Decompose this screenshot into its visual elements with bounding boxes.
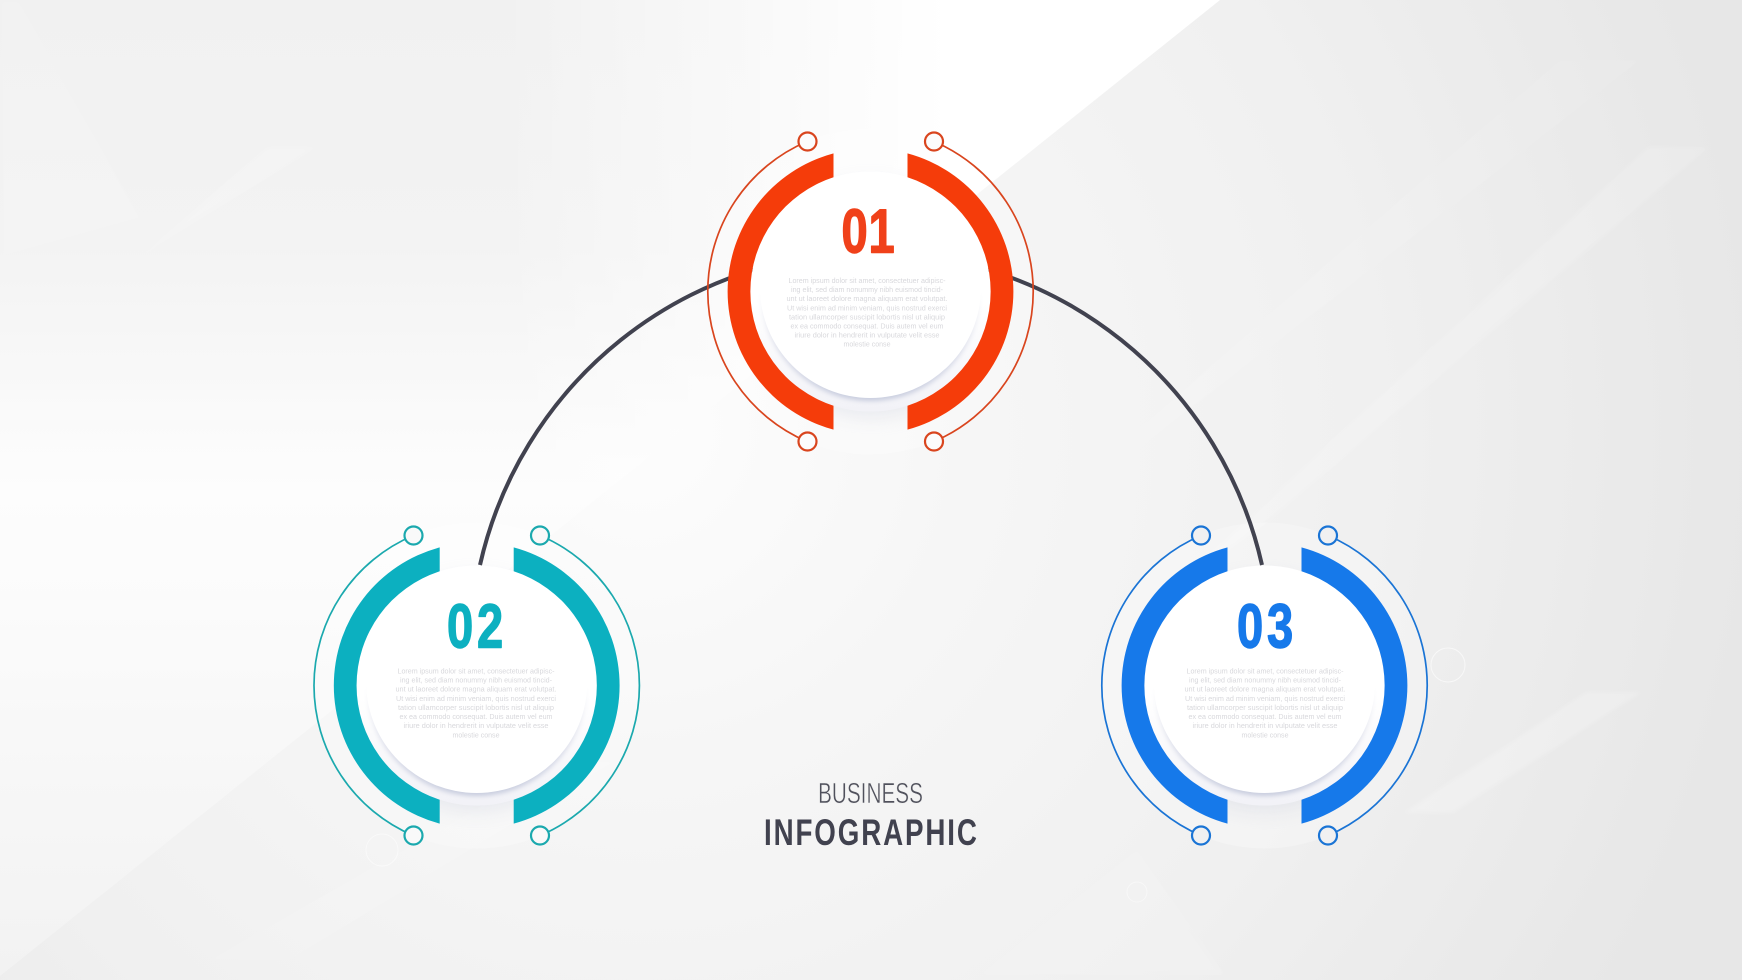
description 03: Lorem ipsum dolor sit amet, consectetuer adipisc- bbox=[1186, 666, 1344, 676]
description 02: tation ullamcorper suscipit lobortis nisl ut aliquip bbox=[398, 703, 554, 712]
description 01: ing elit, sed diam nonummy nibh euismod tincid- bbox=[791, 285, 943, 294]
description 01 bbox=[786, 276, 948, 348]
description 03: ing elit, sed diam nonummy nibh euismod tincid- bbox=[1189, 676, 1341, 684]
soft halos behind rings bbox=[314, 128, 1428, 848]
description 02: Lorem ipsum dolor sit amet, consectetuer adipisc- bbox=[398, 666, 555, 676]
description 03: molestie conse bbox=[1242, 730, 1288, 740]
thick ring segments 02 bbox=[334, 547, 620, 824]
end dots 03 bbox=[1192, 526, 1337, 844]
title line: business: BUSINESS bbox=[818, 778, 923, 810]
title bbox=[764, 778, 979, 853]
connector arc bbox=[480, 252, 1262, 565]
description 03: unt ut laoreet dolore magna aliquam erat volutpat. bbox=[1184, 684, 1346, 694]
description 01: Ut wisi enim ad minim veniam, quis nostrud exerci bbox=[787, 304, 947, 312]
description 02: ex ea commodo consequat. Duis autem vel eum bbox=[400, 712, 552, 721]
number 01: 01 bbox=[842, 196, 895, 266]
thin outline arcs 03 bbox=[1102, 536, 1427, 836]
description 03: tation ullamcorper suscipit lobortis nisl ut aliquip bbox=[1187, 703, 1343, 712]
description 02: unt ut laoreet dolore magna aliquam erat volutpat. bbox=[396, 684, 556, 694]
description 01: unt ut laoreet dolore magna aliquam erat volutpat. bbox=[786, 294, 948, 303]
description 03: Ut wisi enim ad minim veniam, quis nostrud exerci bbox=[1185, 694, 1345, 703]
thin outline arcs 02 bbox=[314, 536, 639, 836]
description 03: iriure dolor in hendrerit in vulputate velit esse bbox=[1192, 721, 1338, 730]
end dots 01 bbox=[798, 132, 943, 450]
description 02: molestie conse bbox=[452, 730, 500, 740]
thick ring segments 01 bbox=[728, 153, 1013, 430]
title line: infographic: INFOGRAPHIC bbox=[764, 811, 979, 853]
thick ring segments 03 bbox=[1122, 547, 1407, 824]
number 03: 03 bbox=[1237, 591, 1297, 661]
thin outline arcs 01 bbox=[708, 142, 1033, 442]
description 01: tation ullamcorper suscipit lobortis nisl ut aliquip bbox=[789, 312, 945, 322]
node 03 bbox=[1102, 526, 1427, 844]
node 02 bbox=[314, 526, 639, 844]
description 02 bbox=[396, 666, 556, 740]
description 02: ing elit, sed diam nonummy nibh euismod tincid- bbox=[400, 676, 552, 684]
number 02: 02 bbox=[447, 591, 507, 661]
node 01 bbox=[708, 132, 1033, 450]
description 01: iriure dolor in hendrerit in vulputate velit esse bbox=[794, 330, 940, 340]
description 01: Lorem ipsum dolor sit amet, consectetuer adipisc- bbox=[788, 276, 946, 285]
end dots 02 bbox=[404, 526, 549, 844]
description 02: Ut wisi enim ad minim veniam, quis nostrud exerci bbox=[396, 694, 556, 703]
description 01: molestie conse bbox=[844, 340, 890, 348]
description 03 bbox=[1184, 666, 1346, 740]
description 02: iriure dolor in hendrerit in vulputate velit esse bbox=[404, 721, 548, 730]
description 01: ex ea commodo consequat. Duis autem vel eum bbox=[790, 322, 944, 330]
description 03: ex ea commodo consequat. Duis autem vel eum bbox=[1188, 712, 1342, 721]
